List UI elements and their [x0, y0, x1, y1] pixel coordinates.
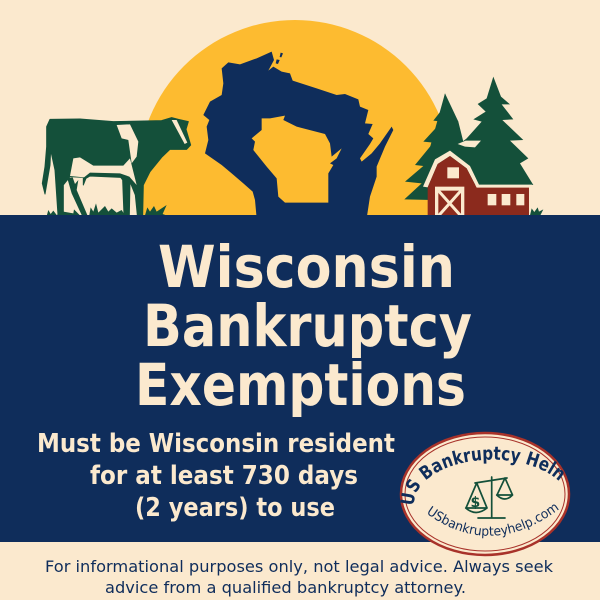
trees: [404, 77, 533, 200]
navy band: [0, 215, 600, 542]
footer disclaimer: advice from a qualified bankruptcy attorney.: [105, 578, 466, 597]
map: Wisconsin silhouette: [203, 52, 393, 218]
residency note: for at least 730 days: [90, 461, 358, 491]
barn door: [435, 187, 464, 217]
footer disclaimer: [45, 557, 554, 597]
sun: [138, 20, 452, 334]
badge bottom text: USbankrupteyhelp.com: [428, 504, 559, 538]
title: Wisconsin: [158, 233, 455, 301]
title: Exemptions: [135, 351, 466, 419]
grass: [47, 203, 168, 216]
badge top text: US Bankruptcy Heln: [400, 446, 564, 504]
residency note: Must be Wisconsin resident: [37, 429, 395, 459]
footer disclaimer: For informational purposes only, not legal advice. Always seek: [45, 557, 554, 576]
icon: scales with dollar: $: [470, 495, 480, 511]
title: Bankruptcy: [143, 292, 472, 360]
icon: scales with dollar: [466, 477, 512, 518]
cow: [42, 118, 191, 216]
title: [135, 233, 472, 419]
residency note: [37, 429, 395, 523]
badge: [400, 432, 570, 556]
barn: [423, 151, 543, 217]
residency note: (2 years) to use: [135, 493, 335, 523]
